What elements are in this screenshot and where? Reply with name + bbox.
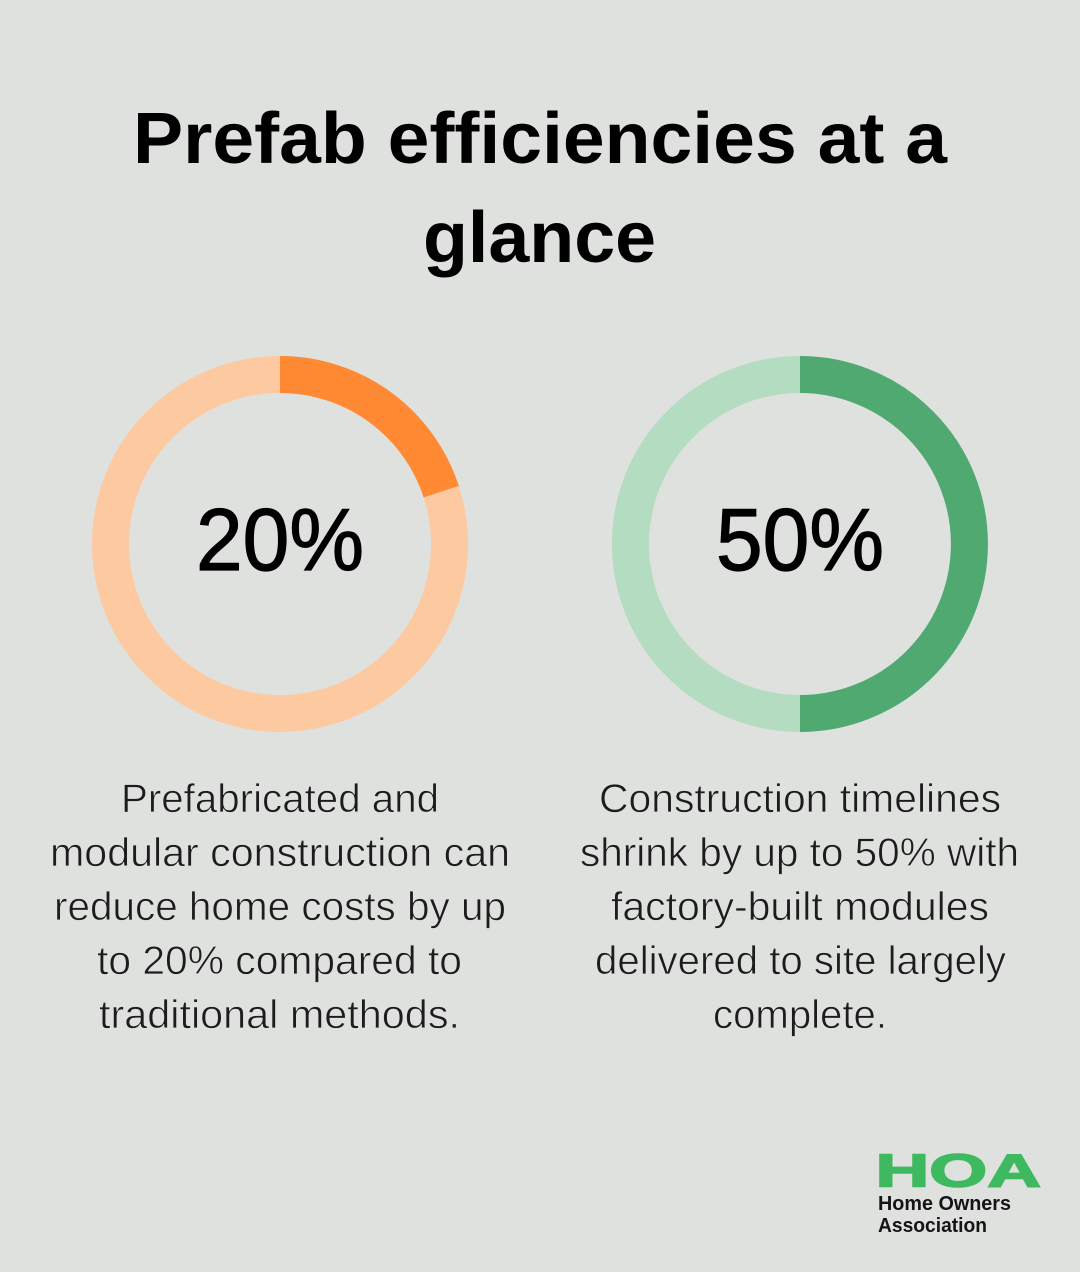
title: [133, 99, 948, 278]
text: cost description: Prefabricated and: [121, 777, 439, 821]
title: Prefab efficiencies at a: [133, 99, 948, 179]
text: cost description: modular construction can: [50, 831, 510, 875]
text: cost description: traditional methods.: [99, 993, 460, 1037]
text: timeline description: delivered to site largely: [595, 939, 1006, 983]
donut chart: 50%: [630, 374, 970, 714]
panel: cost reduction: [50, 374, 510, 1037]
text: cost description: to 20% compared to: [97, 939, 462, 983]
panel: timeline reduction: [580, 374, 1019, 1037]
text: timeline description: shrink by up to 50% with: [580, 831, 1019, 875]
donut chart: 50%: 50%: [716, 490, 884, 589]
text: timeline description: complete.: [713, 993, 887, 1037]
text: timeline description: Construction timelines: [599, 777, 1001, 821]
donut chart: 20%: 20%: [196, 490, 364, 589]
text: cost description: [50, 777, 510, 1037]
logo: Home Owners Association: [876, 1144, 1041, 1237]
text: timeline description: factory-built modules: [611, 885, 989, 929]
text: timeline description: [580, 777, 1019, 1037]
title: glance: [423, 198, 656, 278]
logo: Home Owners Association: Home Owners: [878, 1193, 1011, 1215]
donut chart: 20%: [110, 374, 450, 714]
logo: Home Owners Association: Association: [878, 1215, 987, 1237]
logo: Home Owners Association: HOA: [876, 1144, 1041, 1196]
text: cost description: reduce home costs by up: [54, 885, 506, 929]
